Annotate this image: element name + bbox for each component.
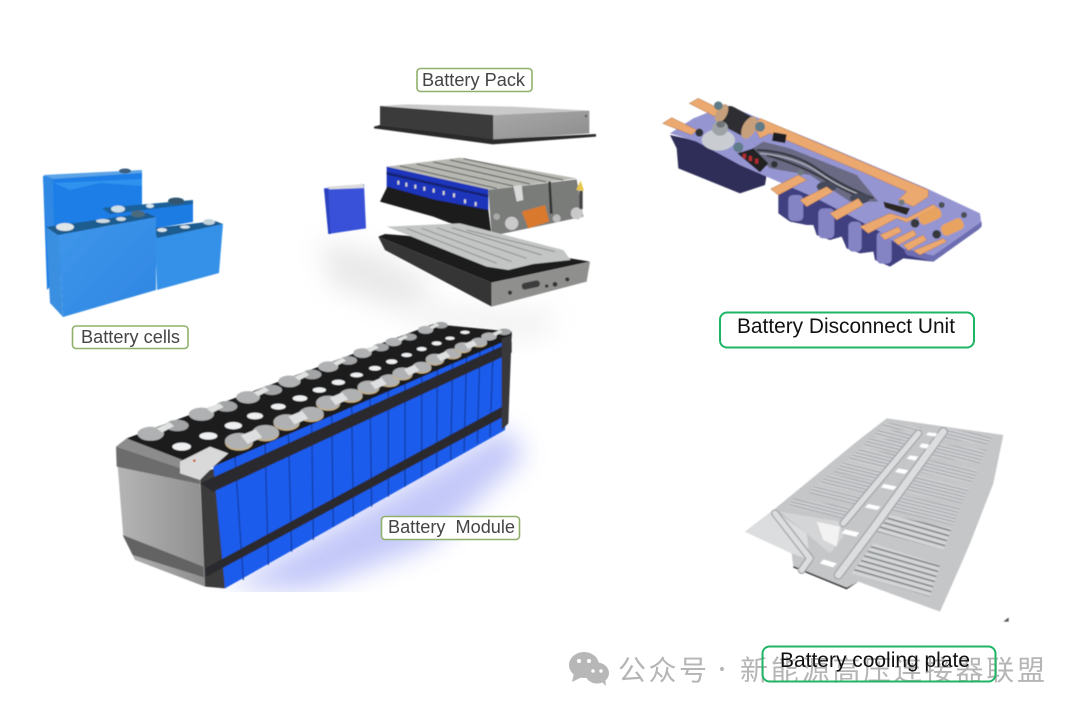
pack lid [374,104,596,144]
cooling plate corner mark [1003,617,1009,622]
BDU connector and bolts [695,101,905,205]
watermark account label: 公众号 [618,649,707,689]
BDU copper bars [663,98,947,255]
label: battery cooling plate: Battery cooling plate [780,649,970,672]
module top surface [116,322,512,480]
front big cell [46,210,156,317]
cooling plate cut-outs [820,432,937,567]
cooling plate right channels [890,428,993,525]
icon: battery pack exploded view [324,104,596,307]
shadow: battery module floor [225,428,525,590]
label: battery cells: Battery cells [81,327,180,347]
BDU fuses [911,202,967,239]
pack module stack [380,158,584,237]
BDU relay with red contacts [737,132,787,172]
icon: battery module [116,322,512,588]
label: battery disconnect unit [720,312,974,348]
icon: battery disconnect unit [663,98,982,267]
icon: battery cells image [43,168,223,317]
BDU contactor [712,102,761,141]
shadow: battery pack [320,240,440,310]
module straps [200,335,512,577]
BDU cable zone [750,142,878,204]
small right cell [155,219,223,290]
cooling plate spine channels [775,432,943,575]
watermark [569,649,1045,689]
watermark name: 新能源高压连接器联盟 [740,649,1045,689]
icon: wechat [569,652,609,686]
watermark dot [720,667,724,671]
cooling plate left channels [788,423,922,518]
BDU cylinders [778,172,980,267]
pack tray and cooling plate [378,223,590,307]
back middle cell [102,198,193,240]
label: battery disconnect unit: Battery Disconnect Unit [737,315,955,338]
BDU dark housing [670,135,767,193]
module end plate [116,447,225,588]
shadow: battery module top [400,305,560,340]
label: battery module: Battery Module [388,517,515,537]
BDU tray top [670,105,982,262]
cooling plate outline [745,418,1003,612]
label: battery pack: Battery Pack [422,70,526,90]
module blue side [213,333,512,588]
icon: battery cooling plate [745,418,1009,622]
back tall cell [43,168,142,290]
cooling plate bright sheet [745,510,810,560]
single blue cell [324,184,366,234]
label: battery cooling plate [762,646,996,682]
